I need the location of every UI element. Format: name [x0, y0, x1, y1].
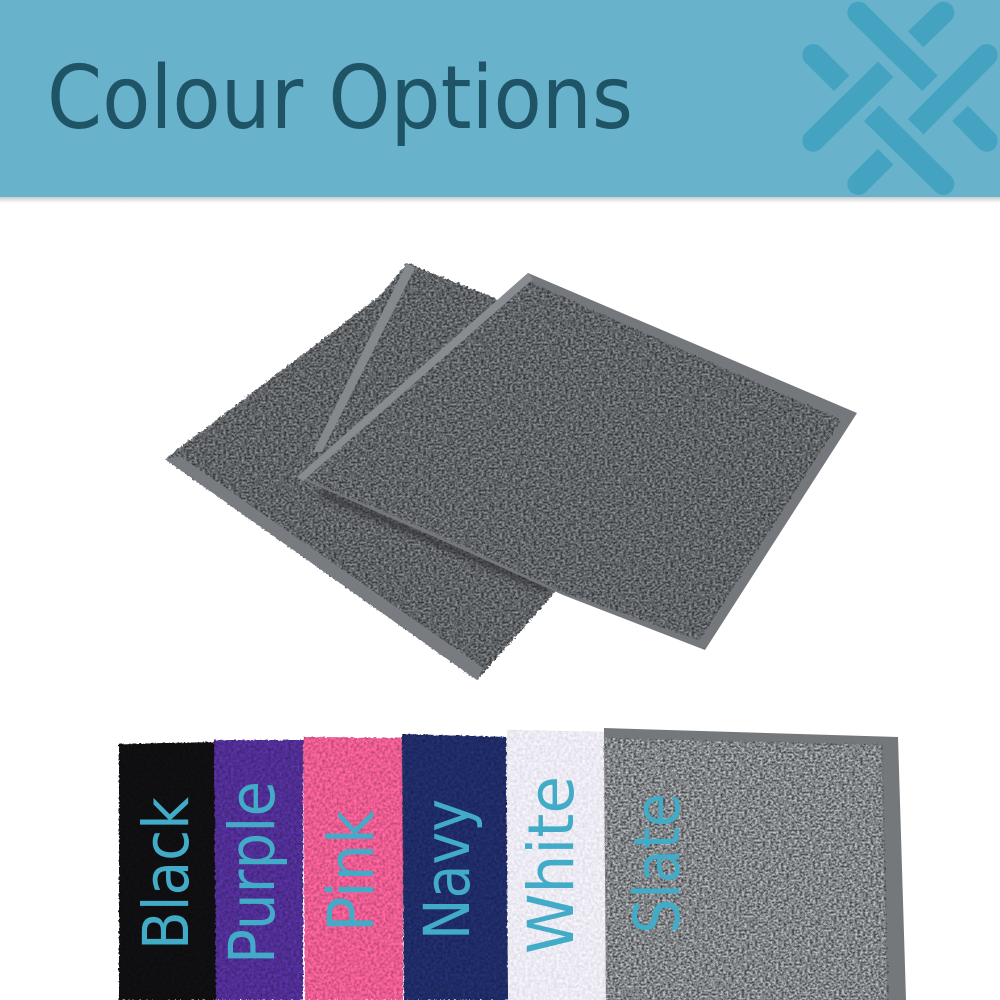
- icon: woven logo: [802, 2, 998, 195]
- swatch: black: [119, 742, 218, 1000]
- main photo: folded slate towels: [165, 263, 857, 680]
- swatch: navy: Navy: [411, 799, 484, 940]
- swatch: white: [507, 730, 606, 1000]
- colour swatch towels: [119, 728, 906, 1000]
- header banner: [0, 0, 1000, 203]
- swatch: purple: Purple: [216, 781, 289, 964]
- back towel: [165, 263, 555, 680]
- front towel: [297, 273, 857, 650]
- swatch: slate: [604, 728, 906, 1000]
- swatch: black: Black: [130, 797, 203, 950]
- swatch: pink: Pink: [315, 810, 388, 932]
- swatch: slate: Slate: [621, 793, 694, 934]
- swatch: navy: [402, 734, 508, 1000]
- fold shadow: [320, 492, 548, 590]
- title: Colour Options: [47, 47, 633, 149]
- swatch: purple: [214, 740, 303, 1000]
- swatch: white: White: [515, 776, 588, 954]
- swatch: pink: [303, 737, 403, 1000]
